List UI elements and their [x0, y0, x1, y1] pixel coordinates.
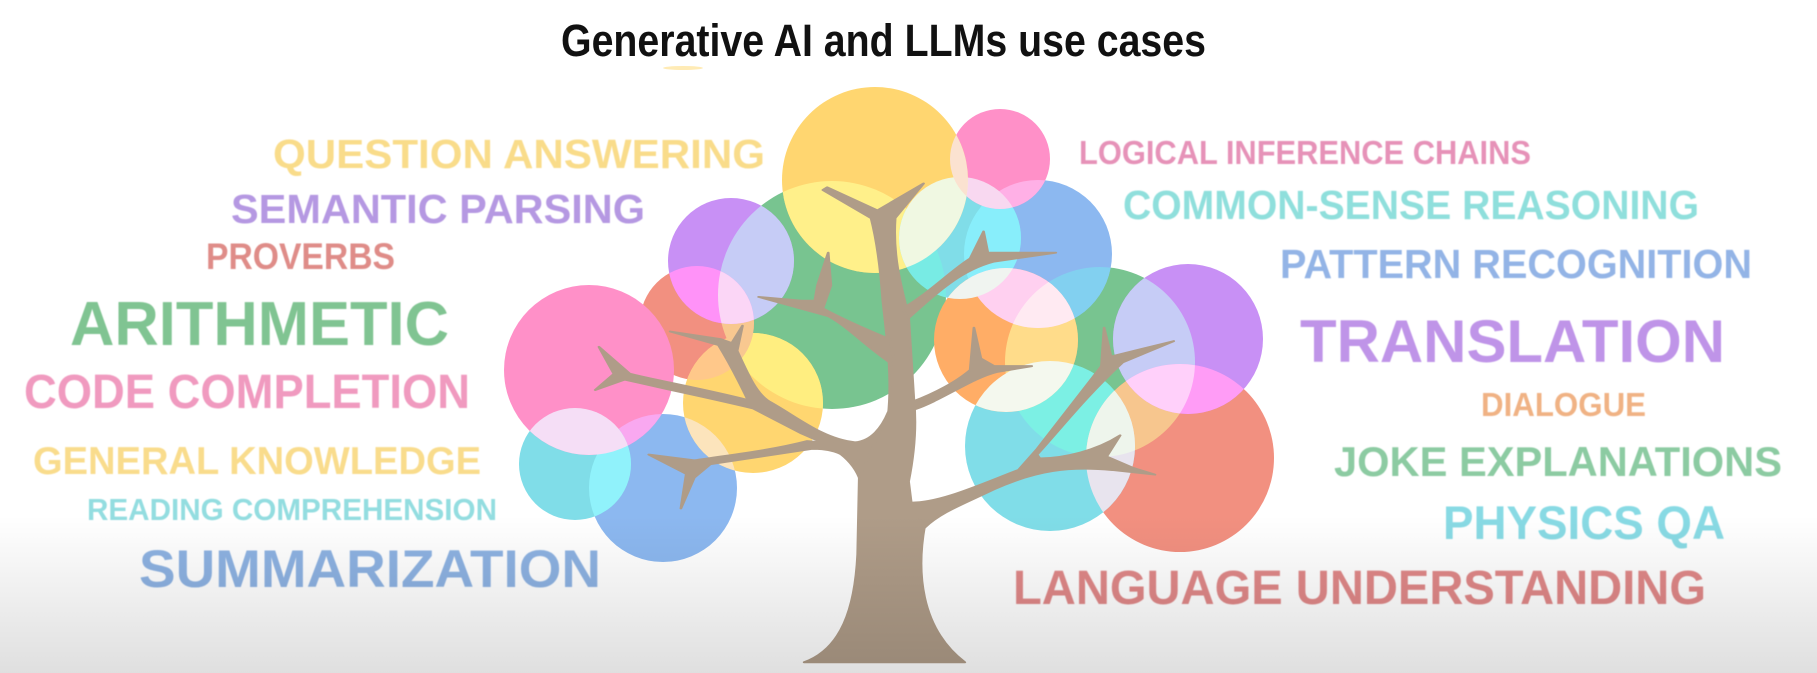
word: logical inference chains: LOGICAL INFERENCE CHAINS	[1079, 134, 1531, 171]
word: language understanding: LANGUAGE UNDERSTANDING	[1013, 562, 1706, 615]
word: common-sense reasoning: COMMON-SENSE REASONING	[1123, 182, 1699, 228]
word: summarization: SUMMARIZATION	[139, 540, 601, 599]
word: semantic parsing: SEMANTIC PARSING	[231, 186, 645, 232]
title: Generative AI and LLMs use cases	[561, 15, 1206, 66]
word: arithmetic: ARITHMETIC	[70, 290, 449, 359]
word: pattern recognition: PATTERN RECOGNITION	[1280, 241, 1752, 287]
word: reading comprehension: READING COMPREHENSION	[87, 492, 497, 527]
canopy overlaps	[530, 135, 1244, 516]
word: question answering: QUESTION ANSWERING	[273, 131, 765, 177]
word: physics qa: PHYSICS QA	[1443, 496, 1725, 549]
left word cloud	[24, 131, 765, 599]
word: dialogue: DIALOGUE	[1481, 386, 1646, 423]
word: code completion: CODE COMPLETION	[24, 366, 470, 419]
tree canopy circles	[504, 87, 1274, 562]
word: joke explanations: JOKE EXPLANATIONS	[1334, 438, 1782, 485]
word: general knowledge: GENERAL KNOWLEDGE	[33, 440, 481, 483]
yellow sliver under title	[663, 66, 703, 70]
tree trunk and branches	[595, 183, 1174, 662]
word: translation: TRANSLATION	[1300, 308, 1725, 375]
word: proverbs: PROVERBS	[206, 236, 395, 277]
bottom grey fade	[0, 515, 1817, 673]
right word cloud	[1013, 134, 1782, 615]
tree illustration	[504, 87, 1274, 662]
